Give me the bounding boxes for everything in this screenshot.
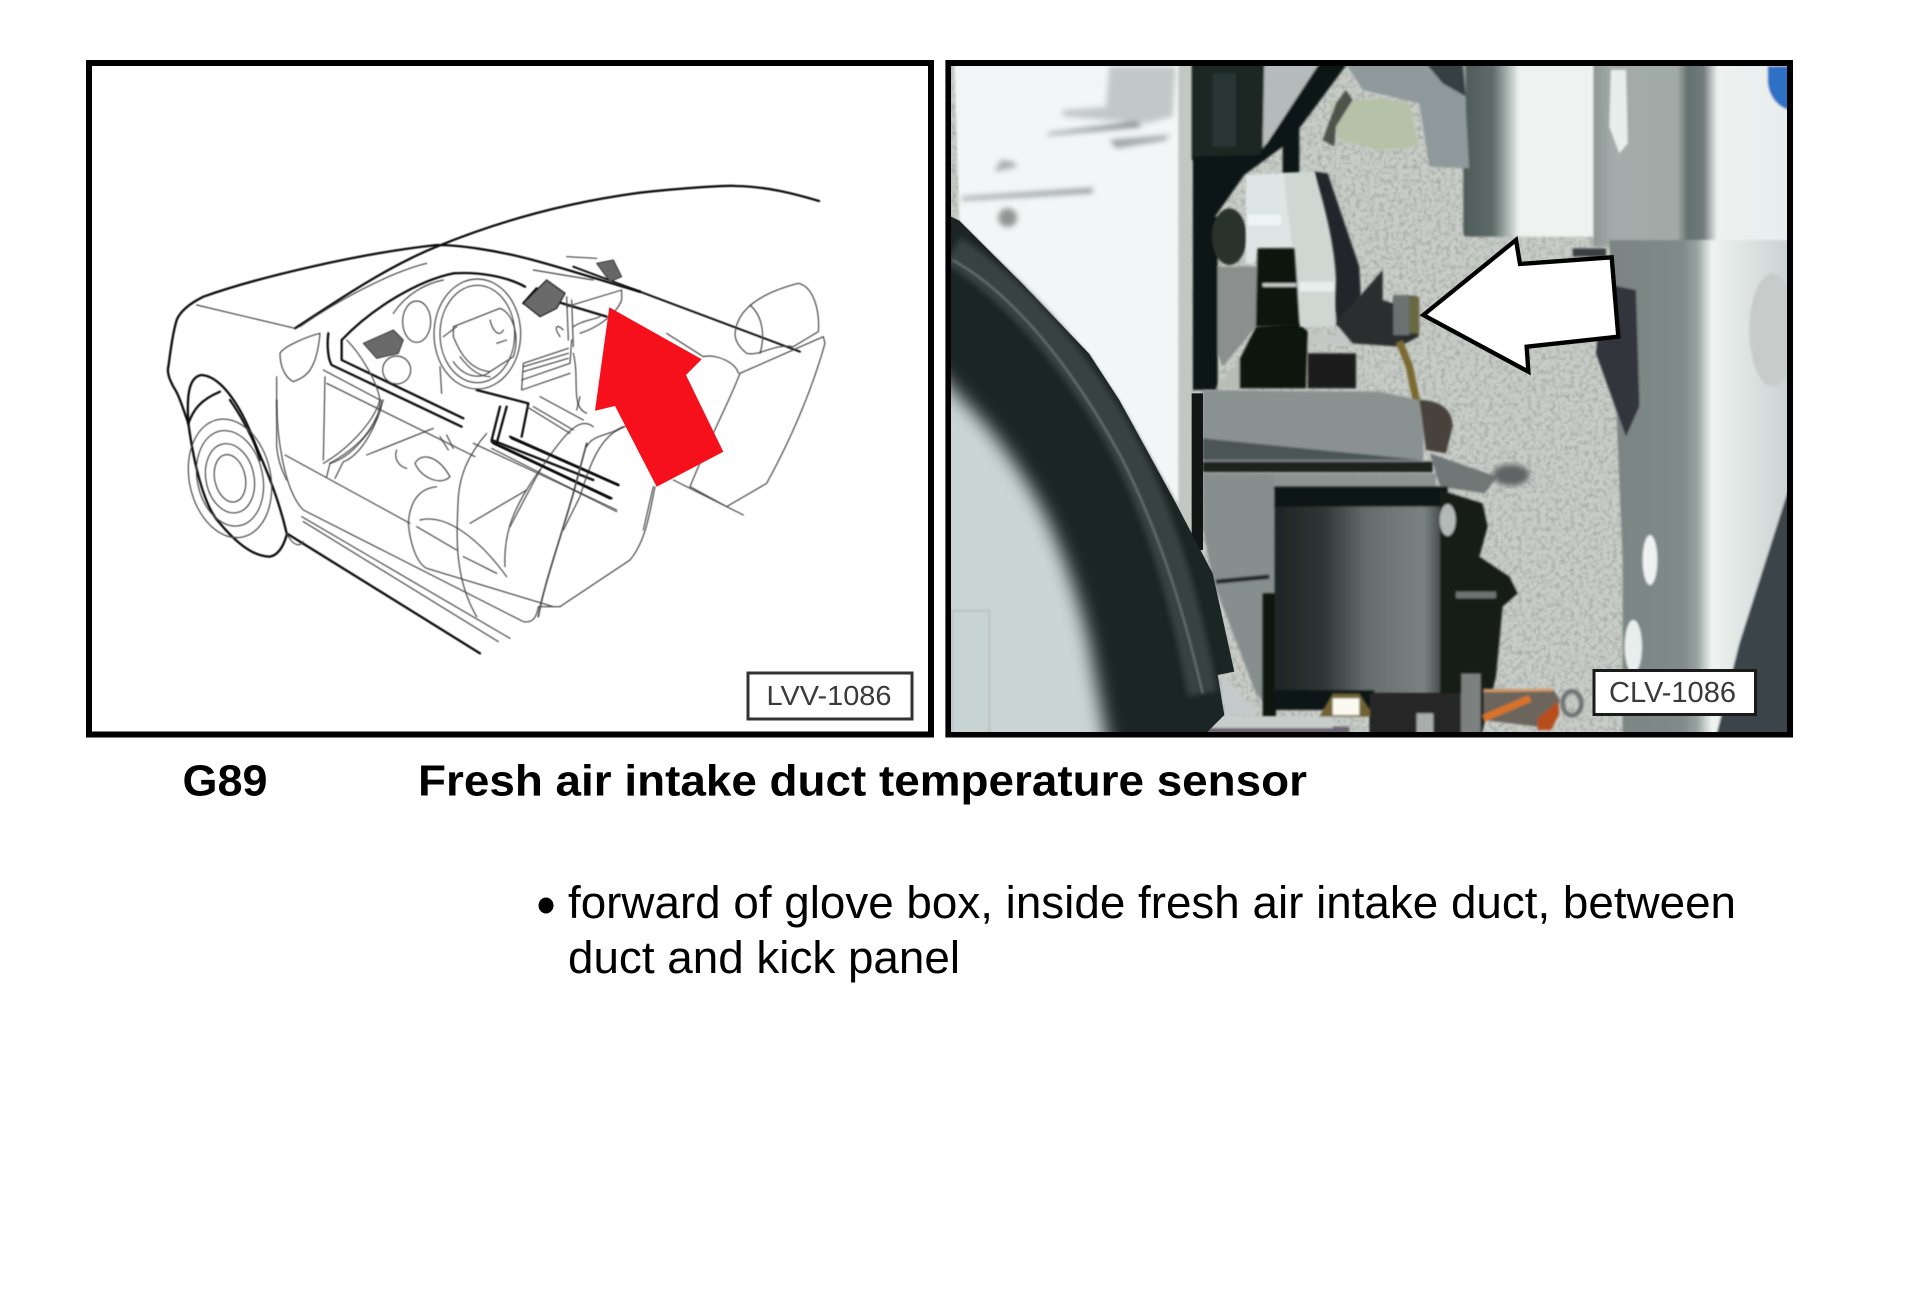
car line drawing [168,186,825,653]
diagram frame [89,63,931,734]
black line beside strip [1192,393,1203,550]
text block: location description [538,877,1736,983]
wheel arch interior [951,366,1120,732]
bottom fasteners and orange connector [1193,673,1581,737]
icon: white arrow pointing to sensor [1423,240,1618,372]
text block: location description: duct and kick panel [568,932,960,983]
icon: far shaded air vent [597,260,622,282]
flap shadow on carpet [1493,464,1529,486]
light body panel [954,63,1178,505]
icon: centre shaded air vent [523,280,565,317]
label: CLV-1086 [1594,670,1756,714]
vertical edge strip [1178,63,1192,543]
seal upper lip [953,250,1203,693]
black hub under disc [1256,248,1356,388]
upper body, windshield and dashboard lines [168,186,819,480]
panel: photograph of sensor in duct [926,60,1813,760]
heading: component name: Fresh air intake duct temperature sensor [418,756,1307,806]
upper fabric and green insulation [1323,63,1469,168]
right hand column and pillar [1463,60,1796,737]
bullet [538,898,554,914]
text block: location description: forward of glove box, inside fresh air intake duct, between [568,877,1736,928]
white sensor disc [1246,172,1336,327]
icon: left shaded air vent [363,330,403,358]
wheel, door and seat lines [178,400,655,653]
dark recess behind sensor [1189,63,1361,390]
label: CLV-1086: CLV-1086 [1609,677,1736,709]
panel wear marks [961,66,1176,227]
icon: red arrow pointing to sensor location [595,307,723,487]
rear seat and centre console lines [473,260,825,530]
carpet speckle [951,66,1623,732]
seal highlight [953,260,1203,693]
label: LVV-1086: LVV-1086 [766,680,892,711]
sensor connector [1336,270,1419,407]
wheel arch seal [951,217,1234,737]
carpet background [951,66,1624,732]
light wedge beside seal [1220,678,1258,716]
label: LVV-1086 [748,673,912,719]
panel: car location diagram [89,63,931,734]
heading: component code G89: G89 [182,756,268,806]
grey duct box [1203,390,1497,713]
photo frame [948,63,1790,734]
lower left plate [952,611,989,737]
photo contents [951,66,1787,732]
black cylinder [1263,487,1518,737]
